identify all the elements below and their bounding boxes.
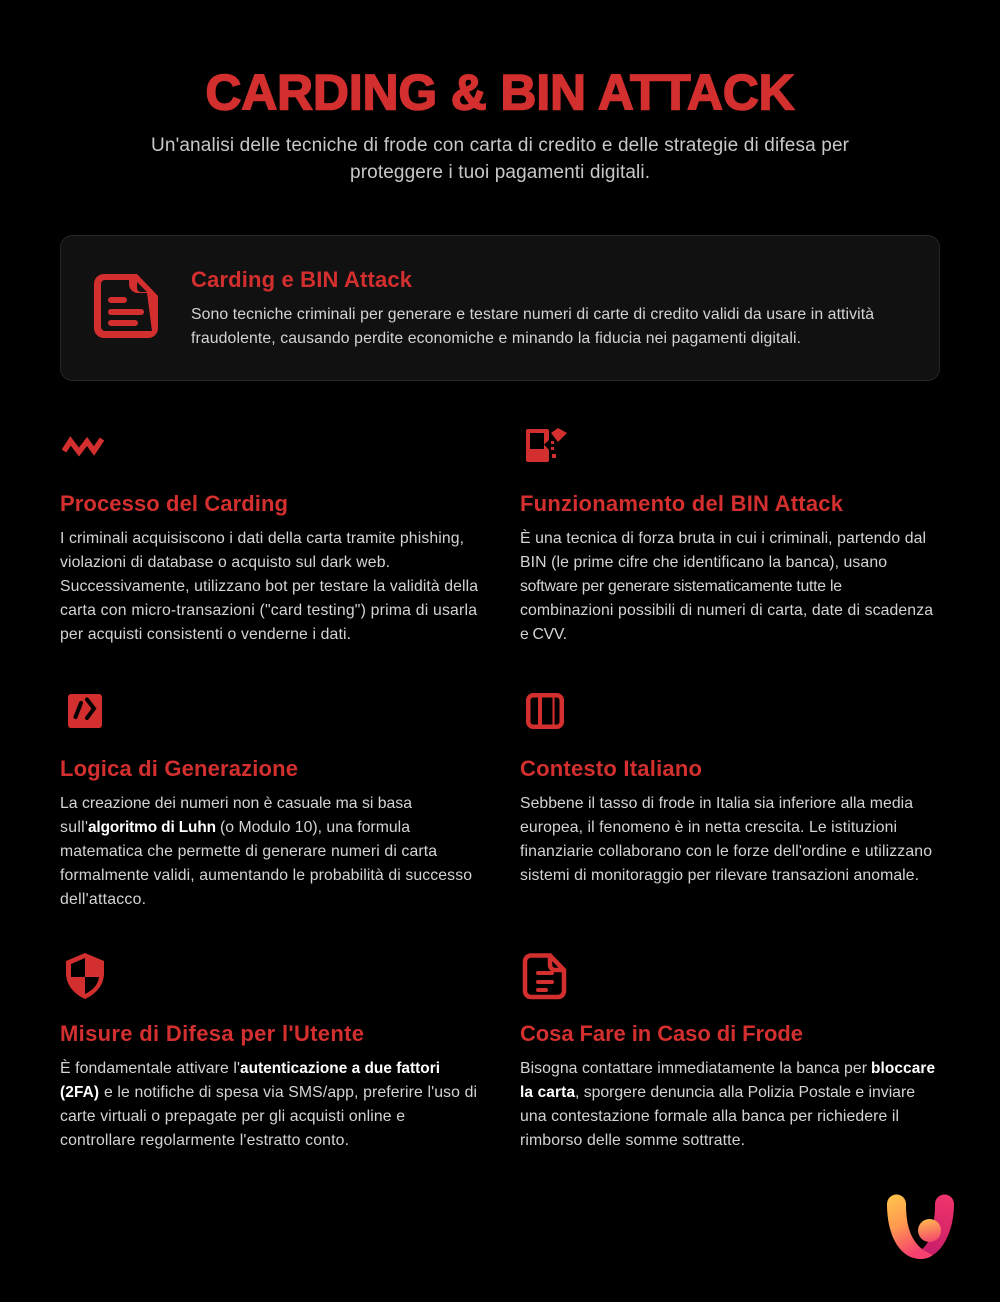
- panel: processo del carding: [60, 439, 478, 643]
- text: logica: matematica che permette di generare numeri di carta: [60, 843, 437, 860]
- text: processo: violazioni di database o acquisto sul dark web.: [60, 554, 390, 571]
- text: cosa fare: , sporgere denuncia alla Polizia Postale e inviare: [575, 1084, 915, 1101]
- text: logica: formalmente validi, aumentando le probabilità di successo: [60, 867, 472, 884]
- text: logica: algoritmo di Luhn: [88, 819, 216, 836]
- icon: document: [94, 274, 158, 338]
- title: CARDING & BIN ATTACK: [206, 64, 794, 120]
- text: logica: [60, 795, 472, 908]
- text: logica: (o Modulo 10), una formula: [220, 819, 410, 836]
- text: funzionamento: [520, 528, 933, 643]
- text: processo: per acquisti consistenti o venderne i dati.: [60, 626, 351, 643]
- text: logica: La creazione dei numeri non è casuale ma si basa: [60, 795, 412, 812]
- text: contesto: sistemi di monitoraggio per rilevare transazioni anomale.: [520, 867, 919, 884]
- text: cosa fare: [520, 1060, 935, 1149]
- panel: intro card: [60, 236, 940, 380]
- text: cosa fare: rimborso delle somme sottratte.: [520, 1132, 745, 1149]
- panel: contesto italiano: [520, 695, 932, 884]
- heading: contesto: Contesto Italiano: [520, 756, 702, 781]
- icon: code square: [68, 694, 102, 728]
- heading: cosa fare: Cosa Fare in Caso di Frode: [520, 1021, 803, 1046]
- subtitle: [151, 135, 850, 183]
- text: cosa fare: Bisogna contattare immediatamente la banca per: [520, 1060, 867, 1077]
- text: funzionamento: e CVV.: [520, 626, 567, 643]
- panel: misure di difesa: [60, 953, 477, 1149]
- text: cosa fare: la carta: [520, 1084, 575, 1101]
- icon: pulse: [64, 439, 102, 452]
- icon: broken phone: [526, 428, 567, 462]
- text: cosa fare: una contestazione formale alla banca per richiedere il: [520, 1108, 899, 1125]
- heading: intro: Carding e BIN Attack: [191, 267, 413, 292]
- text: misure: autenticazione a due fattori: [240, 1060, 440, 1077]
- text: misure: e le notifiche di spesa via SMS/app, preferire l'uso di: [104, 1084, 477, 1101]
- text: intro: Sono tecniche criminali per generare e testare numeri di carte di credito validi da usare in attività: [191, 306, 874, 323]
- text: misure: (2FA): [60, 1084, 99, 1101]
- text: contesto: Sebbene il tasso di frode in Italia sia inferiore alla media: [520, 795, 913, 812]
- subtitle: proteggere i tuoi pagamenti digitali.: [350, 162, 650, 183]
- text: misure: carte virtuali o prepagate per gli acquisti online e: [60, 1108, 405, 1125]
- heading: logica: Logica di Generazione: [60, 756, 298, 781]
- heading: misure: Misure di Difesa per l'Utente: [60, 1021, 364, 1046]
- icon: shield: [66, 953, 104, 999]
- text: logica: sull': [60, 819, 88, 836]
- text: processo: Successivamente, utilizzano bot per testare la validità della: [60, 578, 478, 595]
- icon: columns: [528, 695, 562, 727]
- text: funzionamento: BIN (le prime cifre che identificano la banca), usano: [520, 554, 887, 571]
- heading: processo: Processo del Carding: [60, 491, 288, 516]
- text: misure: controllare regolarmente l'estratto conto.: [60, 1132, 349, 1149]
- text: processo: carta con micro-transazioni ("card testing") prima di usarla: [60, 602, 477, 619]
- heading: funzionamento: Funzionamento del BIN Attack: [520, 491, 844, 516]
- text: contesto: finanziarie collaborano con le forze dell'ordine e utilizzano: [520, 843, 932, 860]
- text: funzionamento: software per generare sistematicamente tutte le: [520, 578, 842, 595]
- text: contesto: europea, il fenomeno è in netta crescita. Le istituzioni: [520, 819, 897, 836]
- text: processo: [60, 530, 478, 643]
- text: logica: dell'attacco.: [60, 891, 146, 908]
- panel: logica di generazione: [60, 694, 472, 908]
- icon: logo: [887, 1194, 954, 1259]
- panel: funzionamento bin attack: [520, 428, 933, 643]
- text: funzionamento: È una tecnica di forza bruta in cui i criminali, partendo dal: [520, 528, 926, 547]
- text: funzionamento: combinazioni possibili di numeri di carta, date di scadenza: [520, 602, 933, 619]
- text: misure: [60, 1058, 477, 1149]
- text: misure: È fondamentale attivare l': [60, 1058, 240, 1077]
- subtitle: Un'analisi delle tecniche di frode con carta di credito e delle strategie di difesa per: [151, 135, 850, 156]
- text: processo: I criminali acquisiscono i dati della carta tramite phishing,: [60, 530, 464, 547]
- icon: file: [525, 955, 564, 997]
- panel: cosa fare: [520, 955, 935, 1149]
- text: intro: [191, 306, 874, 347]
- text: contesto: [520, 795, 932, 884]
- text: intro: fraudolente, causando perdite economiche e minando la fiducia nei pagamenti digitali.: [191, 330, 801, 347]
- text: cosa fare: bloccare: [871, 1060, 935, 1077]
